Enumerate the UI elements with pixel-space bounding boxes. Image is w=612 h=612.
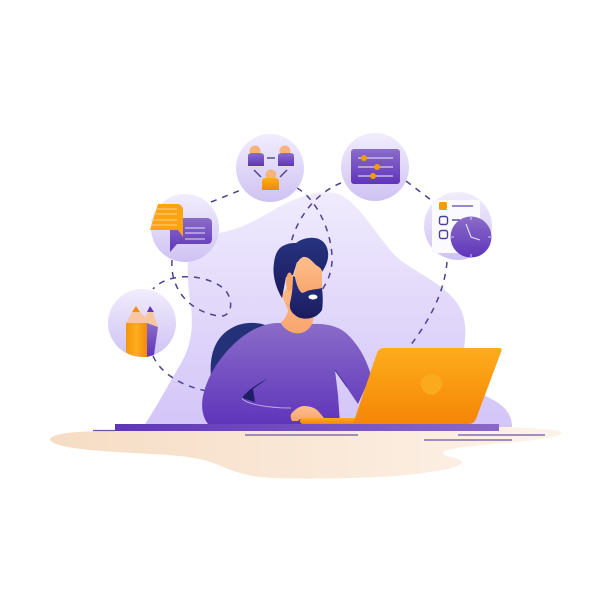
floor lines — [93, 430, 545, 440]
icon: sliders circle — [341, 133, 409, 201]
desk — [115, 424, 499, 431]
elbow gap — [242, 379, 267, 402]
chair — [211, 323, 268, 424]
background blob — [143, 192, 512, 427]
laptop — [300, 348, 502, 424]
ground shape — [50, 427, 562, 479]
man — [202, 238, 371, 424]
torso and arms — [202, 323, 371, 424]
face — [295, 257, 322, 294]
icon: checklist and clock circle — [424, 192, 492, 260]
sleeve line — [242, 398, 291, 408]
icon: people network circle — [236, 134, 304, 202]
dashed connection lines — [153, 181, 447, 391]
icon: pencils circle — [108, 289, 176, 357]
laptop base — [300, 418, 360, 424]
mouth — [308, 294, 318, 300]
laptop logo — [421, 374, 442, 394]
ear — [286, 272, 293, 292]
arm line — [335, 370, 347, 387]
neck — [281, 272, 318, 333]
icon: chat bubbles circle — [150, 194, 219, 262]
laptop screen — [353, 348, 502, 424]
hair — [273, 238, 328, 298]
beard — [290, 276, 323, 319]
hand — [291, 406, 324, 421]
